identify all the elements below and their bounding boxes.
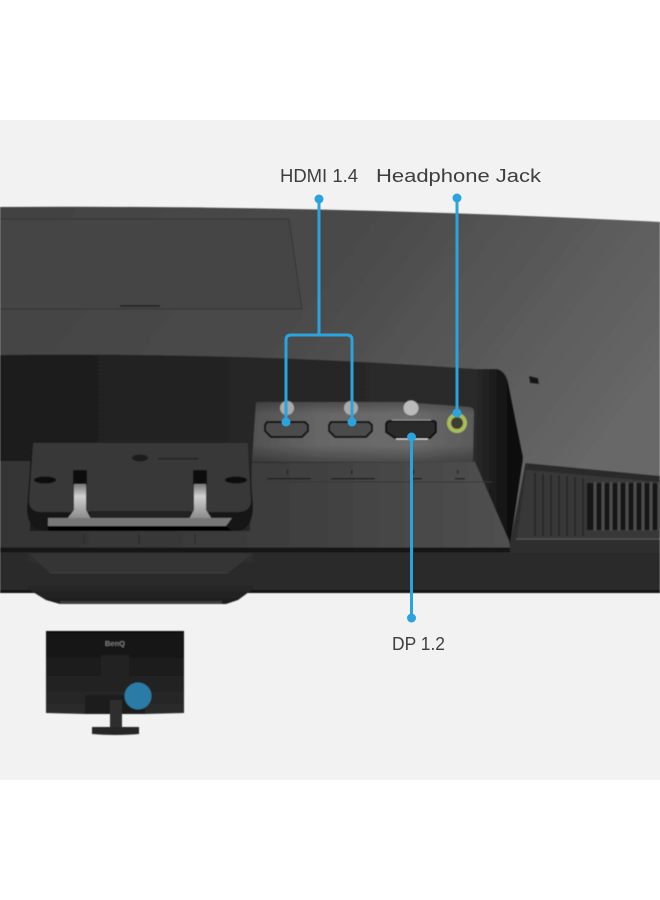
stand mount plate: [27, 443, 253, 531]
thumbnail logo: BenQ: [105, 639, 125, 648]
screw 2: [344, 401, 358, 415]
connector lines: [286, 198, 457, 618]
stand foot strip: [60, 601, 222, 604]
label: Headphone Jack: Headphone Jack: [376, 165, 542, 186]
HDMI bracket line: [286, 199, 352, 422]
monitor rear close-up: [0, 207, 660, 604]
label: DP 1.2: DP 1.2: [392, 633, 445, 654]
port panel: [252, 400, 474, 462]
background panel: [0, 120, 660, 780]
port legend marks: [267, 470, 465, 480]
recess side wall: [474, 369, 523, 543]
headphone jack: [447, 413, 467, 433]
thumbnail: monitor rear view: [46, 631, 184, 735]
bottom shelf: [0, 461, 510, 548]
DisplayPort port: [386, 421, 436, 438]
rear shell: [0, 207, 660, 593]
thumbnail highlight circle: [124, 682, 152, 710]
screw slot left: [34, 476, 56, 484]
shelf tick marks: [84, 534, 195, 544]
screw 1: [280, 401, 294, 415]
screw 3: [404, 400, 418, 416]
label: HDMI 1.4: HDMI 1.4: [280, 165, 358, 186]
bottom bezel: [0, 553, 660, 590]
recess: [0, 355, 523, 548]
lower body: [0, 465, 660, 593]
stand neck: [28, 553, 253, 604]
vent area: [516, 466, 660, 539]
screw slot right: [225, 476, 247, 484]
kensington lock icon: [529, 376, 539, 384]
DP line: [410, 437, 413, 618]
headphone line: [456, 198, 458, 413]
HDMI port 1: [265, 422, 308, 437]
bracket: [90, 511, 190, 519]
connector dots: [282, 194, 462, 622]
HDMI port 2: [329, 422, 372, 437]
VESA cover outline: [0, 219, 302, 309]
